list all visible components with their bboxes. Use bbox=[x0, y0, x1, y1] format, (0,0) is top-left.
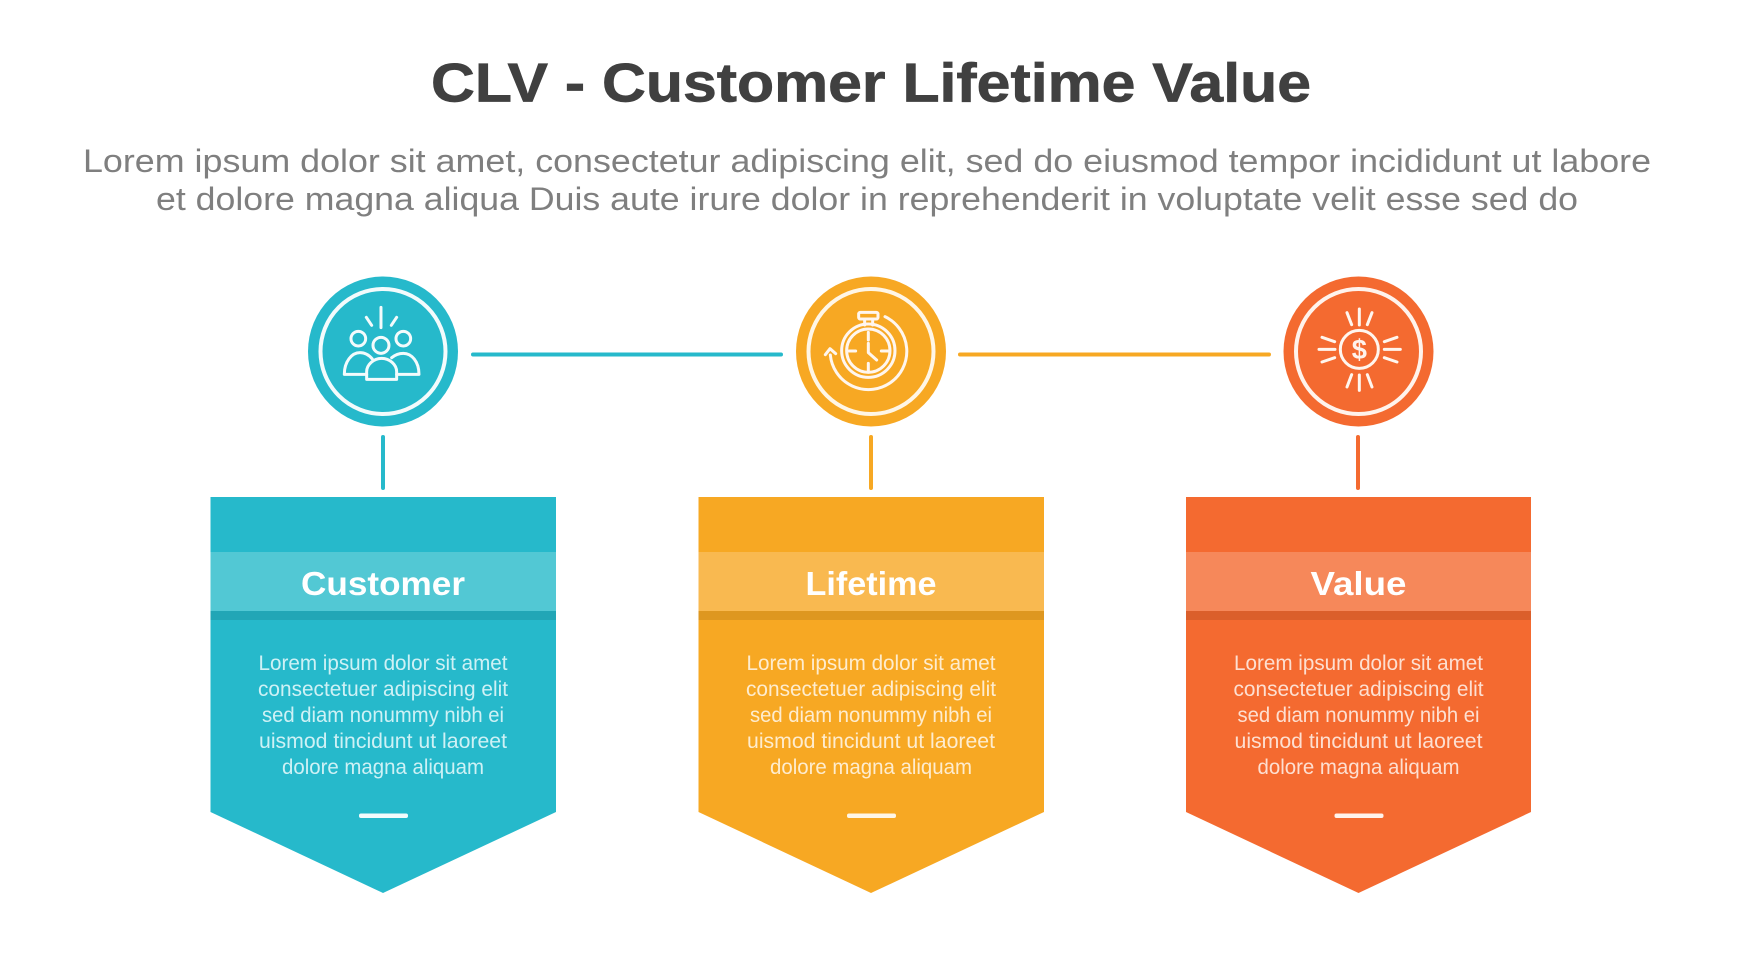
text block: customer: dolore magna aliquam bbox=[282, 756, 484, 779]
icon: glowing dollar coin: $ bbox=[1352, 334, 1367, 365]
column: customer bbox=[210, 276, 556, 893]
text block: customer: Lorem ipsum dolor sit amet bbox=[258, 652, 508, 675]
text block: value: dolore magna aliquam bbox=[1258, 756, 1460, 779]
text block: value bbox=[1234, 652, 1484, 779]
stem: value bbox=[1356, 437, 1360, 488]
text block: lifetime: Lorem ipsum dolor sit amet bbox=[746, 652, 996, 675]
heading: customer: Customer bbox=[301, 565, 465, 602]
text block: customer: uismod tincidunt ut laoreet bbox=[259, 730, 507, 753]
icon: customer circle bbox=[308, 276, 458, 426]
icon: people group bbox=[344, 307, 419, 379]
panel: lifetime bbox=[698, 497, 1044, 893]
icon: lifetime circle bbox=[796, 276, 946, 426]
text block: lifetime: sed diam nonummy nibh ei bbox=[750, 704, 992, 727]
text block: lifetime: dolore magna aliquam bbox=[770, 756, 972, 779]
text block: lifetime: uismod tincidunt ut laoreet bbox=[747, 730, 995, 753]
text block: value: sed diam nonummy nibh ei bbox=[1238, 704, 1480, 727]
icon: stopwatch with arrow bbox=[825, 312, 907, 390]
panel: customer bbox=[210, 497, 556, 893]
icon: value circle bbox=[1284, 276, 1434, 426]
text block: customer: sed diam nonummy nibh ei bbox=[262, 704, 504, 727]
heading: lifetime: Lifetime bbox=[806, 565, 936, 602]
text block: value: consectetuer adipiscing elit bbox=[1234, 678, 1484, 701]
text block: value: uismod tincidunt ut laoreet bbox=[1234, 730, 1483, 753]
text block: value: Lorem ipsum dolor sit amet bbox=[1234, 652, 1483, 675]
title: CLV - Customer Lifetime Value bbox=[431, 52, 1311, 114]
subtitle text block: et dolore magna aliqua Duis aute irure dolor in reprehenderit in voluptate velit esse sed do bbox=[156, 181, 1578, 217]
text block: lifetime bbox=[746, 652, 996, 779]
stem: lifetime bbox=[869, 437, 873, 488]
subtitle text block: Lorem ipsum dolor sit amet, consectetur adipiscing elit, sed do eiusmod tempor incididunt ut labore bbox=[83, 143, 1651, 179]
column: value bbox=[1186, 276, 1531, 893]
icon: glowing dollar coin bbox=[1319, 309, 1400, 390]
column: lifetime bbox=[698, 276, 1044, 893]
stem: customer bbox=[381, 437, 385, 488]
text block: lifetime: consectetuer adipiscing elit bbox=[746, 678, 996, 701]
subtitle text block bbox=[83, 143, 1651, 217]
text block: customer: consectetuer adipiscing elit bbox=[258, 678, 508, 701]
connector: lifetime to value bbox=[960, 352, 1269, 356]
panel: value bbox=[1186, 497, 1531, 893]
heading: value: Value bbox=[1310, 565, 1406, 602]
connector: customer to lifetime bbox=[473, 352, 781, 356]
text block: customer bbox=[258, 652, 508, 779]
